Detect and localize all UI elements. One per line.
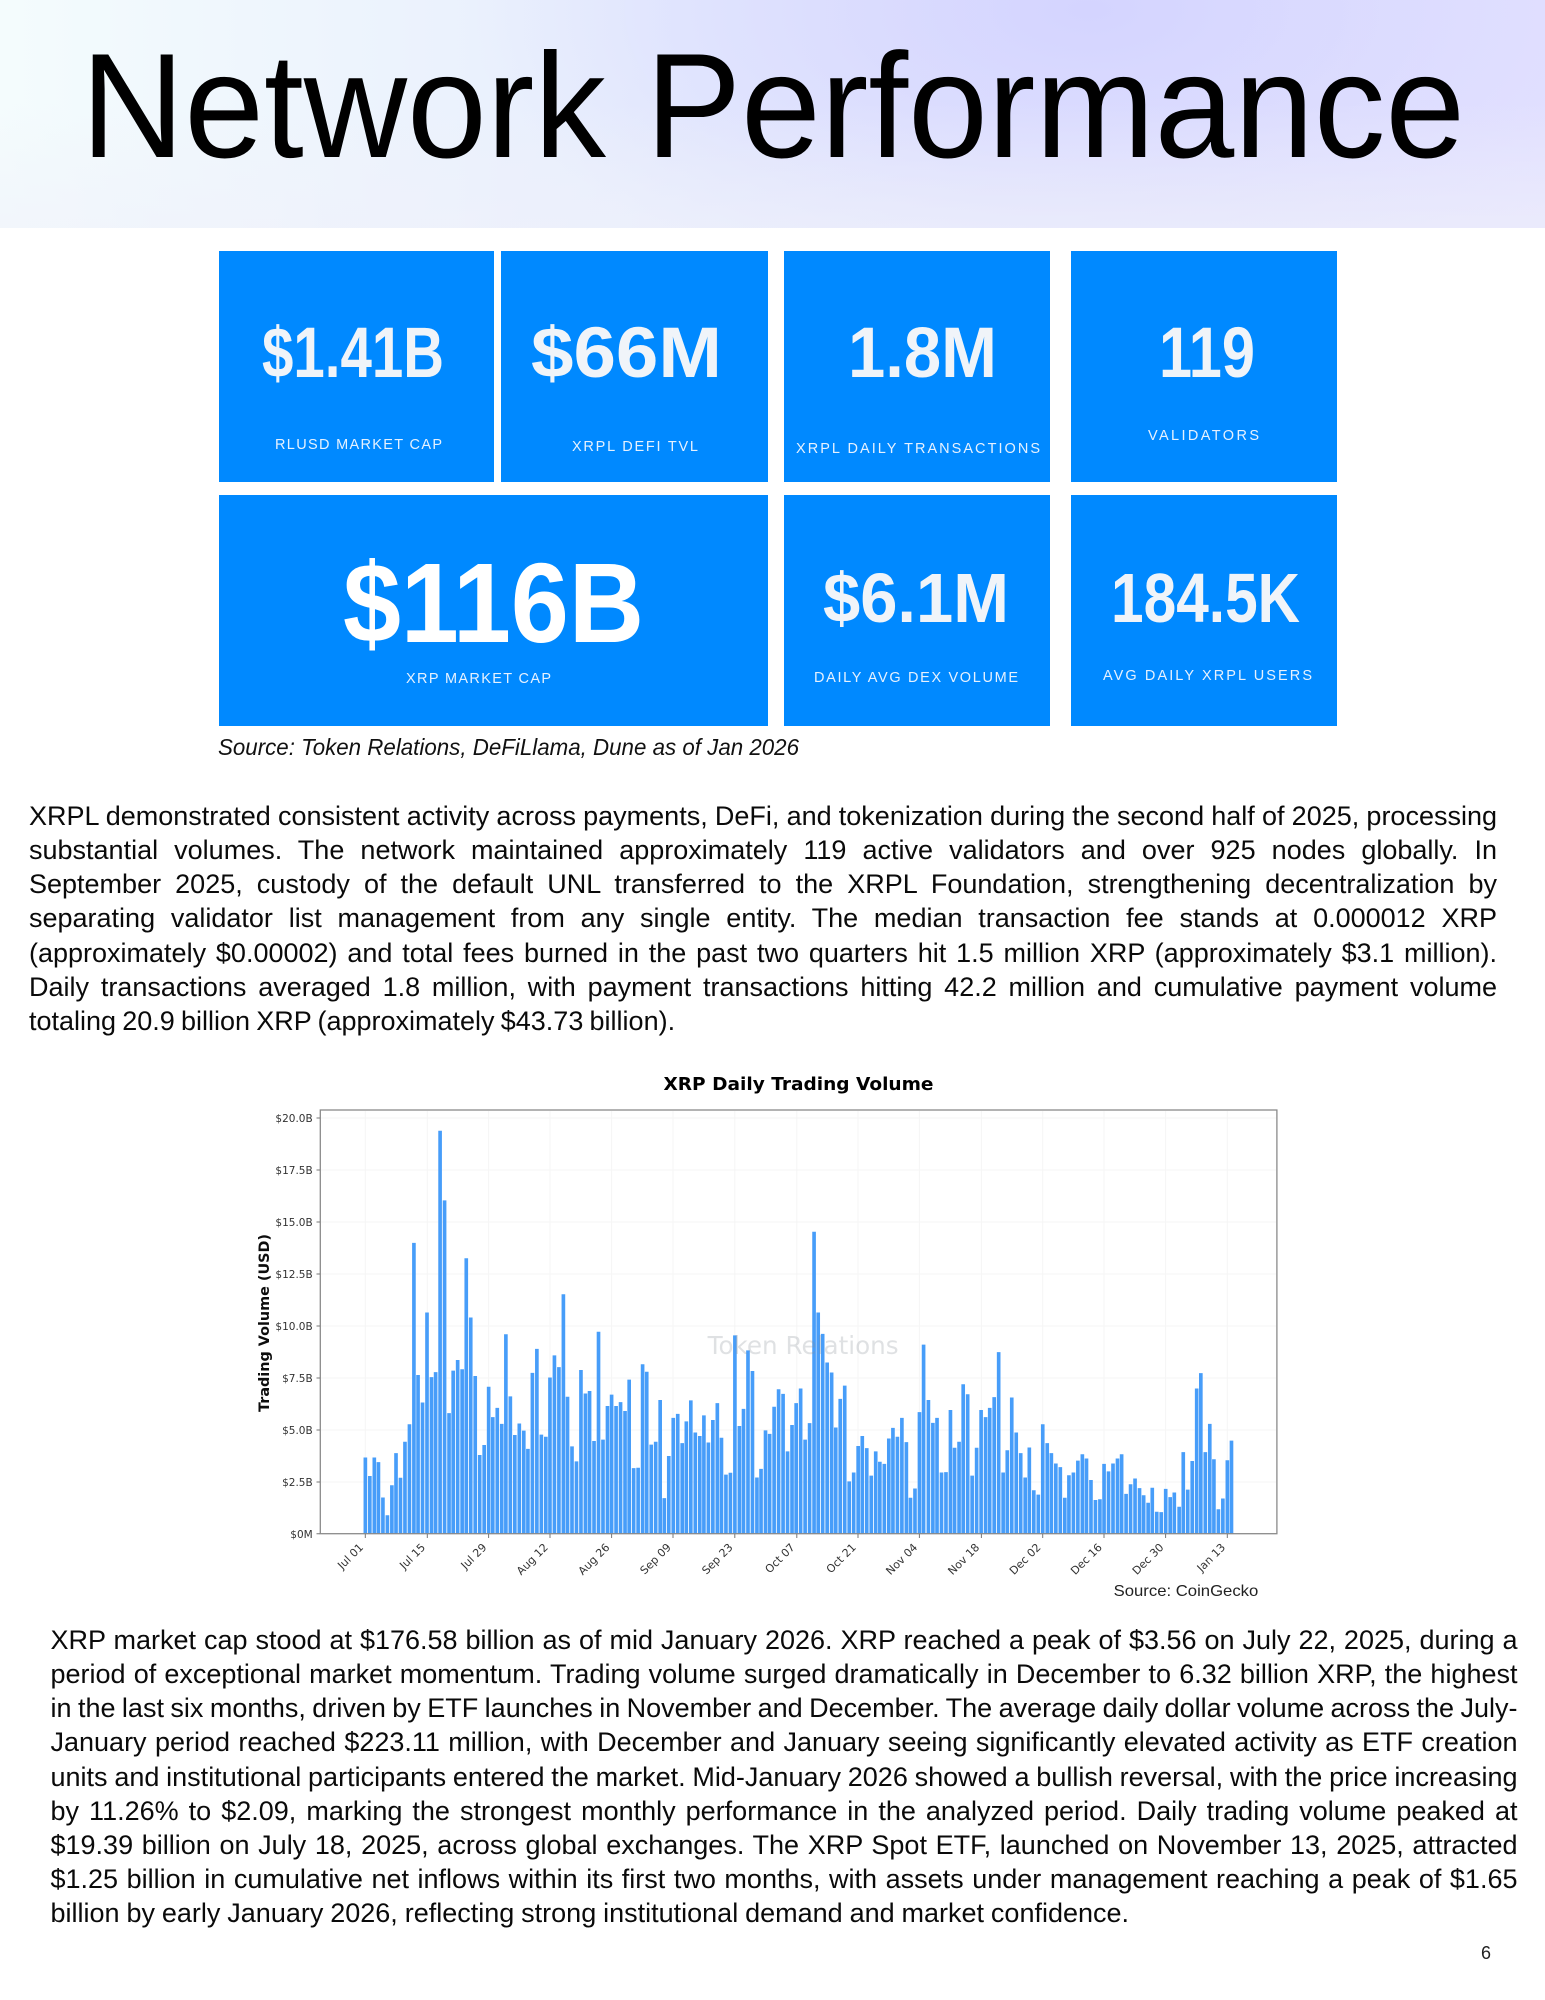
text block: XRP market summary: in the last six months, driven by ETF launches in November and December. The average daily dollar volume across the July- [50,1693,1518,1723]
stat: daily avg DEX volume: DAILY AVG DEX VOLUME [814,670,1018,686]
y axis labels: $5.0B [282,1425,313,1437]
card: XRPL DeFi TVL [501,251,768,482]
card: validators [1071,251,1337,482]
y axis labels: $12.5B [275,1269,313,1281]
bar chart: XRP daily trading volume [257,1074,1277,1600]
stat: validators: VALIDATORS [1148,428,1259,444]
stat: avg daily XRPL users: 184.5K [1111,559,1300,637]
text block: XRP market summary: period of exceptional market momentum. Trading volume surged dramatically in December to 6.32 billion XRP, the highest [50,1659,1518,1689]
stat: avg daily XRPL users [1103,559,1312,684]
y axis labels: $10.0B [275,1321,313,1333]
stat: XRPL DeFi TVL [531,314,722,455]
text block: XRP market summary: $19.39 billion on July 18, 2025, across global exchanges. The XRP Spot ETF, launched on November 13, 2025, attracted [50,1830,1518,1860]
stat: validators [1148,314,1259,444]
text block: XRP market summary [50,1625,1518,1928]
text block: XRP market summary: XRP market cap stood at $176.58 billion as of mid January 2026. XRP reached a peak of $3.56 on July 22, 2025, during a [50,1625,1518,1655]
text block: XRP market summary: January period reached $223.11 million, with December and January seeing significantly elevated activity as ETF creation [50,1727,1518,1757]
text block: XRPL activity summary [29,801,1497,1036]
x axis labels: Dec 30 [1130,1541,1166,1578]
text block: XRPL activity summary: September 2025, custody of the default UNL transferred to the XRPL Foundation, strengthening decentralization by [29,869,1497,899]
title: Network Performance [81,22,1465,189]
card: RLUSD market cap [219,251,494,482]
text block: XRP market summary: by 11.26% to $2.09, marking the strongest monthly performance in the analyzed period. Daily trading volume peaked at [50,1796,1518,1826]
chart source note: Source: CoinGecko [1114,1583,1258,1600]
stat: XRPL daily transactions [796,314,1040,457]
x axis labels: Sep 09 [638,1541,674,1577]
x axis labels: Oct 07 [763,1541,798,1576]
y axis labels: $15.0B [275,1217,313,1229]
text block: XRPL activity summary: XRPL demonstrated consistent activity across payments, DeFi, and tokenization during the second half of 2025, processing [29,801,1497,831]
x axis labels: Jan 13 [1194,1541,1228,1575]
text block: XRPL activity summary: Daily transactions averaged 1.8 million, with payment transactions hitting 42.2 million and cumulative payment volume [29,972,1497,1002]
bars: October to January [761,1232,1231,1534]
page number: 6 [1481,1943,1491,1963]
y axis title: Trading Volume (USD) [257,1234,273,1412]
card: XRPL daily transactions [784,251,1050,482]
text block: XRPL activity summary: (approximately $0.00002) and total fees burned in the past two quarters hit 1.5 million XRP (approximately $3.1 million). [29,938,1497,968]
text block: XRP market summary: units and institutional participants entered the market. Mid-January 2026 showed a bullish reversal, with the price increasing [50,1762,1518,1792]
x axis labels: Nov 18 [945,1541,982,1578]
x axis labels: Dec 02 [1007,1541,1044,1578]
stat: daily avg DEX volume [814,559,1018,686]
stat: RLUSD market cap [262,314,444,453]
panel: stat cards [219,251,1337,726]
y axis labels: $17.5B [275,1165,313,1177]
y axis labels: $2.5B [282,1477,313,1489]
text block: XRPL activity summary: separating validator list management from any single entity. The median transaction fee stands at 0.000012 XRP [29,903,1497,933]
x axis labels: Sep 23 [699,1541,736,1577]
stat: validators: 119 [1159,314,1255,393]
stats source note: Source: Token Relations, DeFiLlama, Dune as of Jan 2026 [218,734,799,760]
x axis labels: Dec 16 [1068,1541,1105,1578]
x axis labels: Jul 15 [396,1541,428,1573]
text block: XRPL activity summary: totaling 20.9 billion XRP (approximately $43.73 billion). [29,1006,675,1036]
stat: daily avg DEX volume: $6.1M [823,559,1009,637]
stat: XRP market cap: XRP MARKET CAP [406,671,551,687]
watermark: Token Relations [707,1331,899,1360]
text block: XRP market summary: $1.25 billion in cumulative net inflows within its first two months, with assets under management reaching a peak of $1.65 [50,1864,1518,1894]
stat: XRPL daily transactions: 1.8M [848,314,997,393]
card: avg daily XRPL users [1071,495,1337,726]
text block: XRP market summary: billion by early January 2026, reflecting strong institutional demand and market confidence. [50,1898,1129,1928]
y axis ticks [316,1118,320,1534]
x axis labels: Jul 01 [334,1541,366,1573]
card: daily avg DEX volume [784,495,1050,726]
card: XRP market cap [219,495,768,726]
text block: XRPL activity summary: substantial volumes. The network maintained approximately 119 active validators and over 925 nodes globally. In [29,835,1497,865]
x axis labels: Oct 21 [824,1541,859,1576]
stat: XRPL daily transactions: XRPL DAILY TRANSACTIONS [796,441,1040,457]
x axis labels [334,1541,1228,1578]
x axis labels: Jul 29 [458,1541,489,1573]
y axis labels: $7.5B [282,1373,313,1385]
bars: July to mid October [365,1131,757,1534]
stat: RLUSD market cap: $1.41B [262,314,444,393]
y axis labels: $0M [290,1529,313,1541]
x axis ticks [365,1534,1227,1538]
x axis labels: Aug 12 [514,1541,551,1578]
chart title: XRP Daily Trading Volume [664,1074,934,1095]
header band [0,0,1545,228]
y axis labels [275,1113,313,1541]
x axis labels: Nov 04 [883,1541,920,1578]
chart axes frame [320,1110,1277,1534]
stat: avg daily XRPL users: AVG DAILY XRPL USERS [1103,668,1312,684]
y axis labels: $20.0B [275,1113,313,1125]
stat: XRPL DeFi TVL: XRPL DEFI TVL [572,439,698,455]
stat: XRP market cap: $116B [343,540,644,666]
stat: RLUSD market cap: RLUSD MARKET CAP [275,437,442,453]
stat: XRPL DeFi TVL: $66M [531,314,722,393]
x axis labels: Aug 26 [576,1541,612,1578]
